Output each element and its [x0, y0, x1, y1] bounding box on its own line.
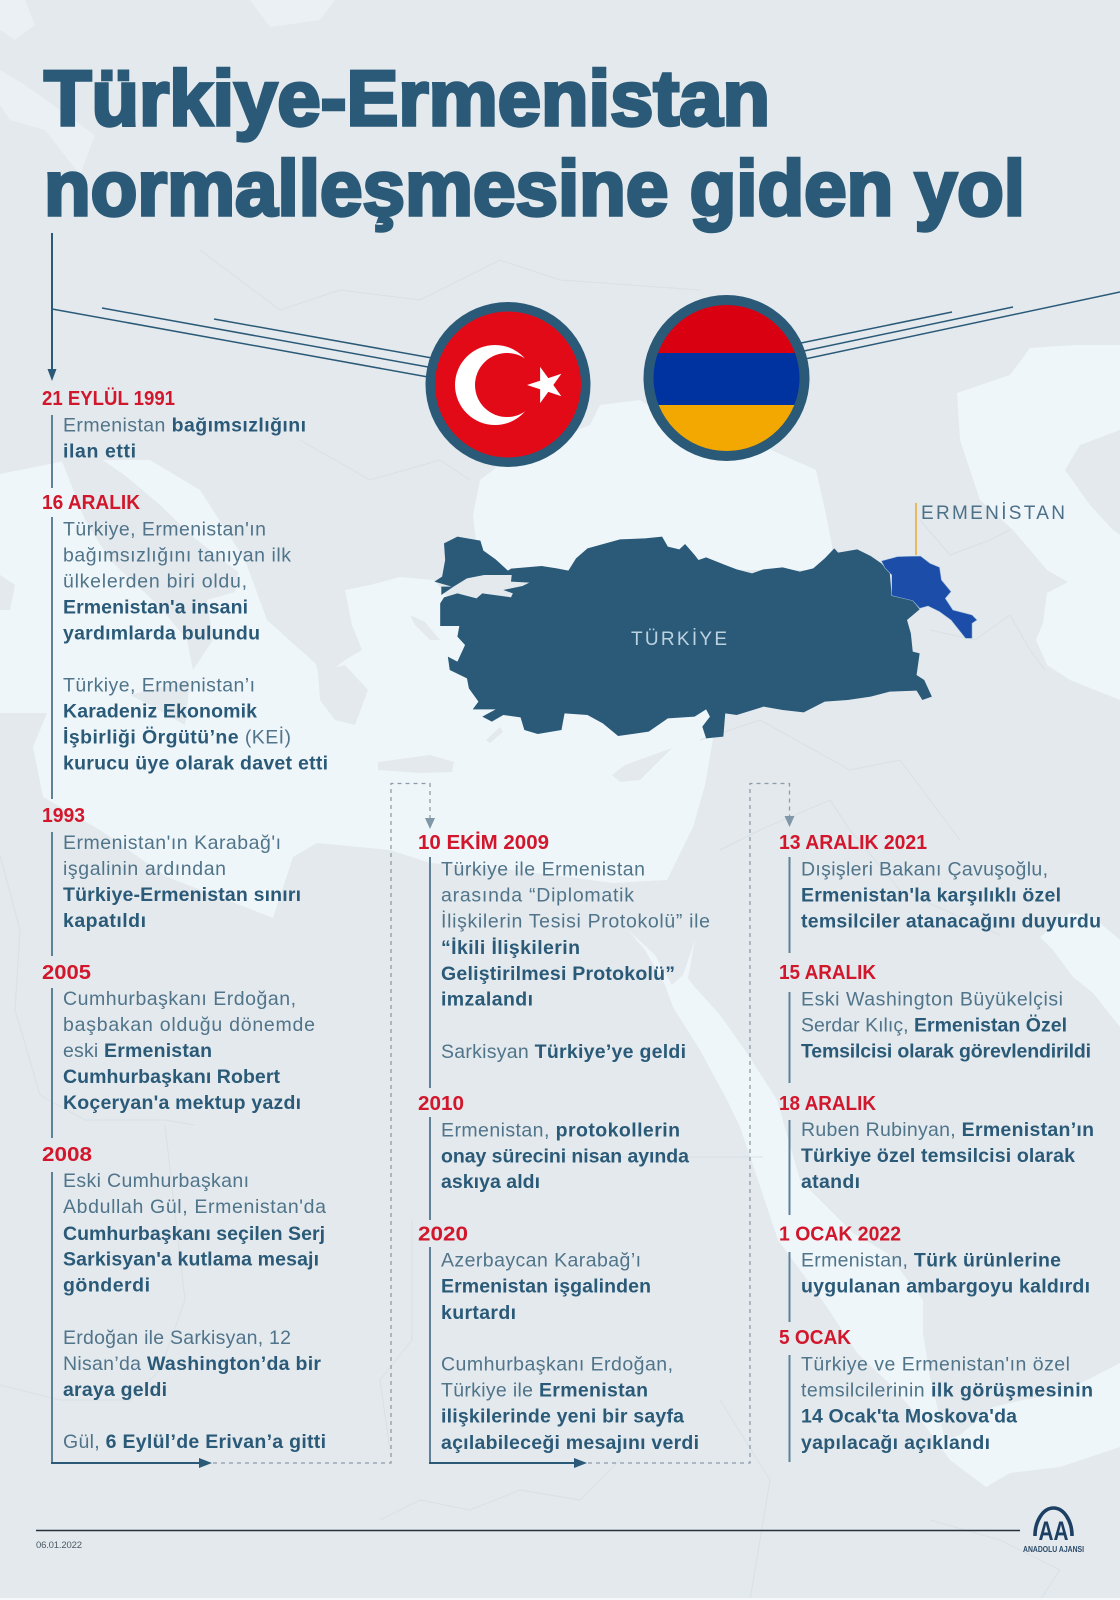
entry: 2005: Cumhurbaşkanı Erdoğan,: [63, 988, 296, 1010]
entry: 2010: [418, 1092, 689, 1220]
entry: 2008: Eski Cumhurbaşkanı: [63, 1170, 249, 1192]
entry: 13 Aralık 2021: temsilciler atanacağını duyurdu: [801, 910, 1101, 932]
timeline column 3: [779, 831, 1101, 1462]
entry: 10 Ekim 2009: Sarkisyan Türkiye’ye geldi: [441, 1041, 686, 1063]
map: Türkiye: [434, 537, 932, 738]
entry: 18 Aralık: atandı: [801, 1171, 860, 1193]
timeline start arrow: [48, 233, 56, 381]
entry: 1 Ocak 2022: uygulanan ambargoyu kaldırdı: [801, 1276, 1090, 1298]
entry: 10 Ekim 2009: arasında “Diplomatik: [441, 884, 634, 906]
entry: 18 Aralık: Türkiye özel temsilcisi olarak: [801, 1145, 1075, 1167]
entry: 2008: Sarkisyan'a kutlama mesajı: [63, 1248, 319, 1270]
title: [44, 54, 1025, 232]
entry: 2020: kurtardı: [441, 1302, 516, 1324]
entry: 15 Aralık: [779, 961, 1091, 1083]
entry: 15 Aralık: Eski Washington Büyükelçisi: [801, 988, 1063, 1010]
entry: 1993: [42, 804, 301, 956]
entry: 13 Aralık 2021: [779, 831, 1101, 953]
connector lines: Türkiye flag: [52, 308, 432, 377]
entry: 1 Ocak 2022: [779, 1222, 1090, 1322]
entry: 1 Ocak 2022: 1 OCAK 2022: [779, 1222, 901, 1246]
entry: 1993: Türkiye-Ermenistan sınırı: [63, 884, 301, 906]
connector lines: Ermenistan flag: [801, 292, 1120, 359]
entry: 1993: Ermenistan'ın Karabağ'ı: [63, 832, 281, 854]
entry: 13 Aralık 2021: Ermenistan'la karşılıklı özel: [801, 884, 1061, 906]
entry: 2008: araya geldi: [63, 1379, 167, 1401]
entry: 13 Aralık 2021: Dışişleri Bakanı Çavuşoğlu,: [801, 858, 1048, 880]
entry: 2005: başbakan olduğu dönemde: [63, 1014, 315, 1036]
entry: 2008: Nisan’da Washington’da bir: [63, 1353, 321, 1375]
entry: 2008: 2008: [42, 1143, 92, 1166]
entry: 16 Aralık: İşbirliği Örgütü’ne (KEİ): [63, 726, 291, 748]
map label: Türkiye: TÜRKİYE: [631, 629, 727, 650]
timeline column 1: [42, 387, 328, 1463]
entry: 2020: ilişkilerinde yeni bir sayfa: [441, 1406, 684, 1428]
entry: 10 Ekim 2009: “İkili İlişkilerin: [441, 936, 580, 959]
arrow: column 2 to column 3: [429, 784, 794, 1468]
entry: 5 Ocak: 14 Ocak'ta Moskova'da: [801, 1406, 1017, 1428]
arrow: column 1 to column 2: [51, 784, 435, 1468]
entry: 21 Eylül 1991: [42, 387, 306, 488]
entry: 21 Eylül 1991: 21 EYLÜL 1991: [42, 387, 175, 410]
entry: 16 Aralık: Türkiye, Ermenistan’ı: [63, 674, 255, 696]
entry: 16 Aralık: 16 ARALIK: [42, 491, 140, 514]
entry: 5 Ocak: temsilcilerinin ilk görüşmesinin: [801, 1380, 1093, 1402]
entry: 16 Aralık: bağımsızlığını tanıyan ilk: [63, 544, 291, 566]
entry: 2010: askıya aldı: [441, 1171, 540, 1193]
entry: 15 Aralık: Temsilcisi olarak görevlendirildi: [801, 1040, 1091, 1062]
entry: 2010: 2010: [418, 1092, 464, 1115]
entry: 10 Ekim 2009: Türkiye ile Ermenistan: [441, 858, 645, 880]
entry: 10 Ekim 2009: [418, 831, 710, 1088]
entry: 5 Ocak: [779, 1326, 1093, 1462]
entry: 2020: Azerbaycan Karabağ’ı: [441, 1250, 641, 1272]
timeline column 2: [418, 831, 710, 1463]
footer rule and date: 06.01.2022: [36, 1540, 82, 1551]
entry: 2010: Ermenistan, protokollerin: [441, 1120, 680, 1142]
entry: 5 Ocak: Türkiye ve Ermenistan'ın özel: [801, 1354, 1070, 1376]
entry: 1 Ocak 2022: Ermenistan, Türk ürünlerine: [801, 1250, 1061, 1272]
entry: 2008: [42, 1143, 326, 1463]
entry: 10 Ekim 2009: İlişkilerin Tesisi Protokolü” ile: [441, 910, 710, 932]
entry: 2008: gönderdi: [63, 1274, 150, 1296]
entry: 1993: 1993: [42, 804, 85, 827]
map: Ermenistan: [881, 556, 977, 638]
entry: 2020: açılabileceği mesajını verdi: [441, 1432, 699, 1454]
entry: 5 Ocak: yapılacağı açıklandı: [801, 1432, 990, 1454]
entry: 2008: Abdullah Gül, Ermenistan'da: [63, 1196, 326, 1218]
entry: 21 Eylül 1991: Ermenistan bağımsızlığını: [63, 414, 306, 436]
entry: 16 Aralık: [42, 491, 328, 799]
entry: 16 Aralık: kurucu üye olarak davet etti: [63, 752, 328, 774]
entry: 18 Aralık: Ruben Rubinyan, Ermenistan’ın: [801, 1119, 1094, 1141]
entry: 2020: Cumhurbaşkanı Erdoğan,: [441, 1354, 673, 1376]
title: Türkiye-Ermenistan: [44, 54, 770, 142]
logo: Anadolu Ajansı: ANADOLU AJANSI: [1023, 1544, 1084, 1554]
entry: 2008: Erdoğan ile Sarkisyan, 12: [63, 1327, 291, 1349]
icon: Ermenistan flag: [644, 295, 810, 461]
entry: 2005: 2005: [42, 961, 91, 984]
entry: 18 Aralık: [779, 1092, 1094, 1215]
entry: 2020: 2020: [418, 1222, 468, 1246]
entry: 1993: kapatıldı: [63, 910, 146, 932]
entry: 1993: işgalinin ardından: [63, 858, 226, 880]
entry: 13 Aralık 2021: 13 ARALIK 2021: [779, 831, 927, 854]
logo: Anadolu Ajansı: [1023, 1508, 1084, 1554]
entry: 16 Aralık: Ermenistan'a insani: [63, 596, 248, 618]
entry: 5 Ocak: 5 OCAK: [779, 1326, 851, 1349]
entry: 21 Eylül 1991: ilan etti: [63, 440, 136, 462]
entry: 2020: Türkiye ile Ermenistan: [441, 1380, 648, 1402]
entry: 15 Aralık: 15 ARALIK: [779, 961, 876, 984]
entry: 10 Ekim 2009: 10 EKİM 2009: [418, 831, 549, 854]
entry: 16 Aralık: Türkiye, Ermenistan'ın: [63, 518, 266, 540]
entry: 16 Aralık: Karadeniz Ekonomik: [63, 700, 257, 722]
entry: 2010: onay sürecini nisan ayında: [441, 1146, 689, 1168]
entry: 10 Ekim 2009: imzalandı: [441, 988, 533, 1010]
title: normalleşmesine giden yol: [44, 144, 1025, 232]
logo: Anadolu Ajansı: AA: [1038, 1516, 1068, 1546]
entry: 2005: eski Ermenistan: [63, 1040, 212, 1062]
entry: 2005: Koçeryan'a mektup yazdı: [63, 1092, 301, 1114]
entry: 2008: Cumhurbaşkanı seçilen Serj: [63, 1223, 325, 1245]
icon: Türkiye flag: [426, 302, 590, 467]
entry: 2005: [42, 961, 315, 1138]
entry: 2005: Cumhurbaşkanı Robert: [63, 1066, 280, 1088]
entry: 16 Aralık: yardımlarda bulundu: [63, 622, 260, 644]
entry: 2020: Ermenistan işgalinden: [441, 1276, 651, 1298]
entry: 18 Aralık: 18 ARALIK: [779, 1092, 876, 1115]
entry: 16 Aralık: ülkelerden biri oldu,: [63, 570, 247, 592]
entry: 10 Ekim 2009: Geliştirilmesi Protokolü”: [441, 963, 675, 985]
entry: 15 Aralık: Serdar Kılıç, Ermenistan Özel: [801, 1014, 1067, 1036]
entry: 2020: [418, 1222, 699, 1463]
map label: Ermenistan with pointer: ERMENİSTAN: [921, 503, 1065, 524]
entry: 2008: Gül, 6 Eylül’de Erivan’a gitti: [63, 1431, 326, 1453]
